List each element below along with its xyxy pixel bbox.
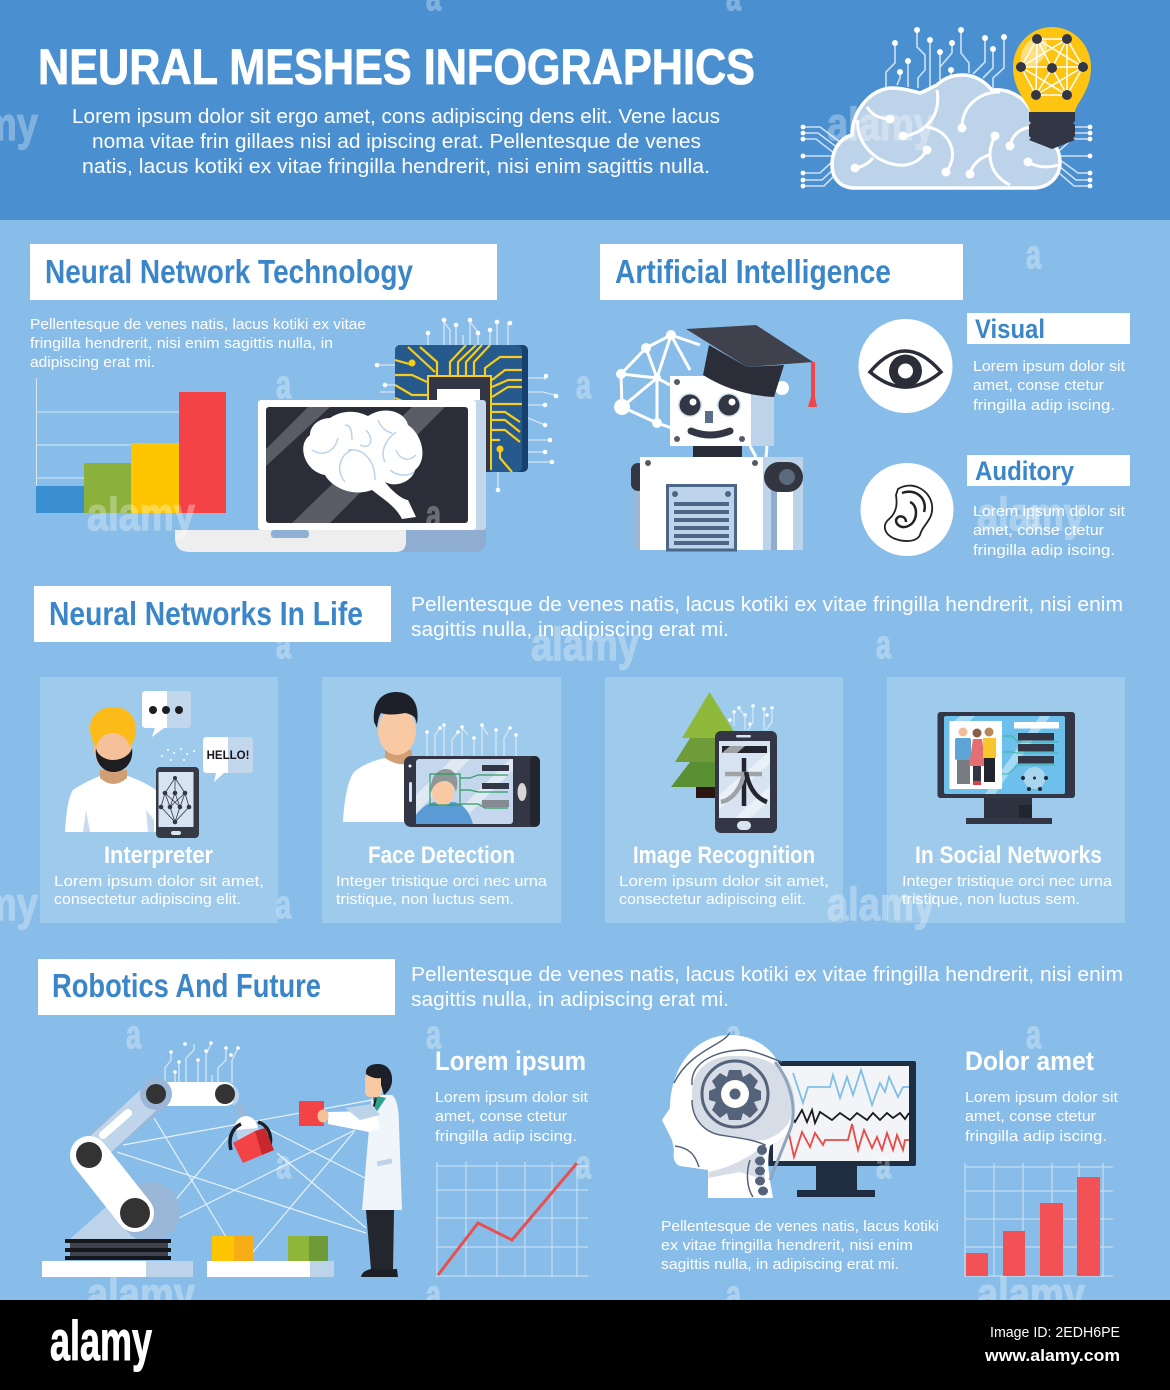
card text: face detection: tristique, non luctus sem. <box>336 891 514 908</box>
header intro text: noma vitae frin gillaes nisi ad ipiscing erat. Pellentesque de venes <box>92 131 701 153</box>
stock watermark overlay: a <box>576 363 592 407</box>
visual label and text: amet, conse ctetur <box>973 377 1104 394</box>
stock watermark overlay: alamy <box>87 1268 195 1320</box>
card title: interpreter: Interpreter <box>104 842 213 869</box>
card text: in social networks: Integer tristique orci nec urna <box>902 873 1113 890</box>
caption below head <box>661 1218 939 1273</box>
caption below head: Pellentesque de venes natis, lacus kotiki <box>661 1218 939 1235</box>
stock watermark overlay: a <box>876 1143 892 1187</box>
card text: face detection: Integer tristique orci nec urna <box>336 873 548 890</box>
stock watermark overlay: alamy <box>531 618 639 670</box>
speech bubble: dots <box>142 691 191 737</box>
icon: monitor with photo recognition <box>938 712 1075 824</box>
card text: in social networks: tristique, non luctus sem. <box>902 891 1080 908</box>
title: NEURAL MESHES INFOGRAPHICS <box>38 39 755 95</box>
stock watermark overlay: alamy <box>977 1268 1085 1320</box>
illustration: robot arm and scientist <box>42 1041 402 1277</box>
speech bubble: hello: HELLO! <box>207 750 249 762</box>
heading: Robotics And Future <box>38 959 395 1015</box>
neural networks in life text: Pellentesque de venes natis, lacus kotiki ex vitae fringilla hendrerit, nisi enim <box>411 594 1123 616</box>
lorem ipsum text: fringilla adip iscing. <box>435 1128 577 1145</box>
auditory label and text: Lorem ipsum dolor sit <box>973 503 1126 520</box>
stock watermark overlay: alamy <box>827 878 935 930</box>
phone with neural network <box>156 748 199 838</box>
stock watermark overlay: a <box>126 1013 142 1057</box>
phone landscape <box>404 756 540 827</box>
brain on screen <box>303 411 422 519</box>
robot head <box>750 395 774 446</box>
stock watermark overlay: alamy <box>87 488 195 540</box>
panel: in social networks <box>887 677 1125 923</box>
card text: interpreter: Lorem ipsum dolor sit amet, <box>54 873 264 890</box>
heading: Neural Networks In Life <box>34 586 391 642</box>
neural networks in life text: sagittis nulla, in adipiscing erat mi. <box>411 619 729 641</box>
torso and arms <box>634 490 642 550</box>
character strokes <box>721 758 767 806</box>
chest panel <box>668 486 736 550</box>
spine <box>755 1145 768 1196</box>
light bulb <box>1013 27 1091 149</box>
stock watermark overlay: a <box>276 1143 292 1187</box>
dolor amet text: Lorem ipsum dolor sit <box>965 1089 1119 1106</box>
visual label and text <box>967 313 1130 414</box>
panel: image recognition <box>605 677 843 923</box>
brain folds <box>855 90 1058 185</box>
neural network technology text <box>30 317 366 371</box>
auditory label and text <box>967 455 1130 559</box>
stock watermark overlay: a <box>276 883 292 927</box>
arm circuit <box>165 1044 238 1083</box>
heading: Neural Networks In Life: Neural Networks In Life <box>49 595 363 632</box>
page background <box>0 220 1170 1300</box>
lorem ipsum text <box>435 1089 589 1145</box>
lorem ipsum text: Lorem ipsum dolor sit <box>435 1089 589 1106</box>
wave: blue <box>793 1070 909 1105</box>
visual label and text: Lorem ipsum dolor sit <box>973 358 1126 375</box>
icon: man with phone scanning face <box>343 692 540 827</box>
heading: Artificial Intelligence <box>600 244 963 300</box>
neural network technology text: fringilla hendrerit, nisi enim sagittis nulla, in <box>30 336 333 352</box>
card text: image recognition: Lorem ipsum dolor sit amet, <box>619 873 829 890</box>
robotics and future text <box>411 964 1123 1011</box>
heading: Neural Network Technology <box>30 244 497 300</box>
cargo blocks <box>212 1236 328 1261</box>
panel: interpreter <box>40 677 278 923</box>
bar chart: growth <box>36 378 226 513</box>
heading: Artificial Intelligence: Artificial Intelligence <box>615 253 891 290</box>
footer bar <box>0 1300 1170 1390</box>
illustration: robotic head and monitor <box>662 1032 916 1198</box>
stock watermark overlay: a <box>576 1143 592 1187</box>
visual label and text: fringilla adip iscing. <box>973 397 1115 414</box>
monitor <box>767 1061 916 1197</box>
card text: image recognition: consectetur adipiscing elit. <box>619 891 806 908</box>
connection lines <box>117 1100 372 1253</box>
card title: in social networks: In Social Networks <box>915 842 1102 869</box>
graduation cap <box>703 345 784 397</box>
image id: Image ID: 2EDH6PE <box>990 1324 1120 1341</box>
header intro text: natis, lacus kotiki ex vitae fringilla hendrerit, nisi enim sagittis nulla. <box>82 156 710 178</box>
wave: black <box>788 1110 909 1123</box>
platforms <box>42 1261 334 1277</box>
card text: interpreter <box>54 873 264 908</box>
line chart <box>436 1162 588 1277</box>
website: www.alamy.com <box>984 1346 1120 1365</box>
gear <box>702 1061 768 1127</box>
stock watermark overlay: a <box>1026 233 1042 277</box>
auditory label and text: Auditory <box>975 456 1074 486</box>
scientist <box>318 1064 402 1277</box>
lorem ipsum text: amet, conse ctetur <box>435 1108 567 1125</box>
circuit traces <box>803 30 1090 186</box>
stock watermark overlay: a <box>426 493 442 537</box>
card text: image recognition <box>619 873 829 908</box>
chip <box>395 345 528 472</box>
robot arm <box>65 1078 274 1260</box>
header intro text: Lorem ipsum dolor sit ergo amet, cons adipiscing dens elit. Vene lacus <box>72 106 720 128</box>
neural networks in life text <box>411 594 1123 641</box>
neural network technology text: Pellentesque de venes natis, lacus kotiki ex vitae <box>30 317 366 333</box>
visual label and text: Visual <box>975 314 1045 344</box>
stock watermark overlay: alamy <box>827 98 935 150</box>
icon: ear <box>860 463 954 556</box>
caption below head: sagittis nulla, in adipiscing erat mi. <box>661 1256 899 1273</box>
head <box>662 1035 794 1198</box>
icon: tree and phone with character <box>671 692 777 833</box>
icon: eye <box>858 319 952 413</box>
heading: Neural Network Technology: Neural Network Technology <box>45 253 414 290</box>
stock watermark overlay: a <box>1026 493 1042 537</box>
icon: man in turban with phone <box>65 691 253 838</box>
lorem ipsum heading: Lorem ipsum <box>435 1046 586 1076</box>
card text: face detection <box>336 873 548 908</box>
auditory label and text: fringilla adip iscing. <box>973 542 1115 559</box>
neural mesh head <box>621 335 700 430</box>
bar chart: dolor amet <box>965 1163 1113 1277</box>
caption below head: ex vitae fringilla hendrerit, nisi enim <box>661 1237 913 1254</box>
icon: processor chip and laptop with brain <box>175 318 558 552</box>
robotics and future text: sagittis nulla, in adipiscing erat mi. <box>411 989 729 1011</box>
heading: Robotics And Future: Robotics And Future <box>52 967 321 1004</box>
stock watermark overlay: a <box>276 623 292 667</box>
dolor amet heading: Dolor amet <box>965 1046 1094 1076</box>
auditory label and text: amet, conse ctetur <box>973 522 1104 539</box>
chip circuit traces <box>375 322 558 490</box>
neural network technology text: adipiscing erat mi. <box>30 355 155 371</box>
panel: face detection <box>322 677 561 923</box>
stock watermark overlay: a <box>426 1273 442 1317</box>
circuit above phone <box>427 726 516 756</box>
card text: interpreter: consectetur adipiscing elit. <box>54 891 241 908</box>
card text: in social networks <box>902 873 1113 908</box>
photo people <box>955 728 996 785</box>
stock watermark overlay: a <box>876 623 892 667</box>
icon: graduate robot <box>614 325 817 550</box>
stock watermark overlay: a <box>726 1273 742 1317</box>
stock watermark overlay: a <box>426 1013 442 1057</box>
card title: face detection: Face Detection <box>368 842 515 869</box>
dolor amet text: amet, conse ctetur <box>965 1108 1096 1125</box>
icon: cloud brain with light bulb <box>801 27 1092 188</box>
speech bubble: hello <box>203 737 253 782</box>
stock watermark overlay: a <box>276 363 292 407</box>
card title: image recognition: Image Recognition <box>633 842 815 869</box>
stock watermark overlay: alamy <box>977 488 1085 540</box>
wave: red <box>773 1124 909 1157</box>
network glyph <box>1021 767 1048 791</box>
robotics and future text: Pellentesque de venes natis, lacus kotiki ex vitae fringilla hendrerit, nisi enim <box>411 964 1123 986</box>
red block in hand <box>299 1101 324 1126</box>
laptop <box>175 530 406 552</box>
header intro text <box>72 106 720 178</box>
stock watermark overlay: a <box>726 1013 742 1057</box>
dolor amet text <box>965 1089 1119 1145</box>
stock watermark overlay: a <box>1026 1013 1042 1057</box>
dolor amet text: fringilla adip iscing. <box>965 1128 1107 1145</box>
cloud brain <box>832 75 1060 188</box>
header band <box>0 0 1170 220</box>
footer logo: alamy <box>50 1309 152 1372</box>
